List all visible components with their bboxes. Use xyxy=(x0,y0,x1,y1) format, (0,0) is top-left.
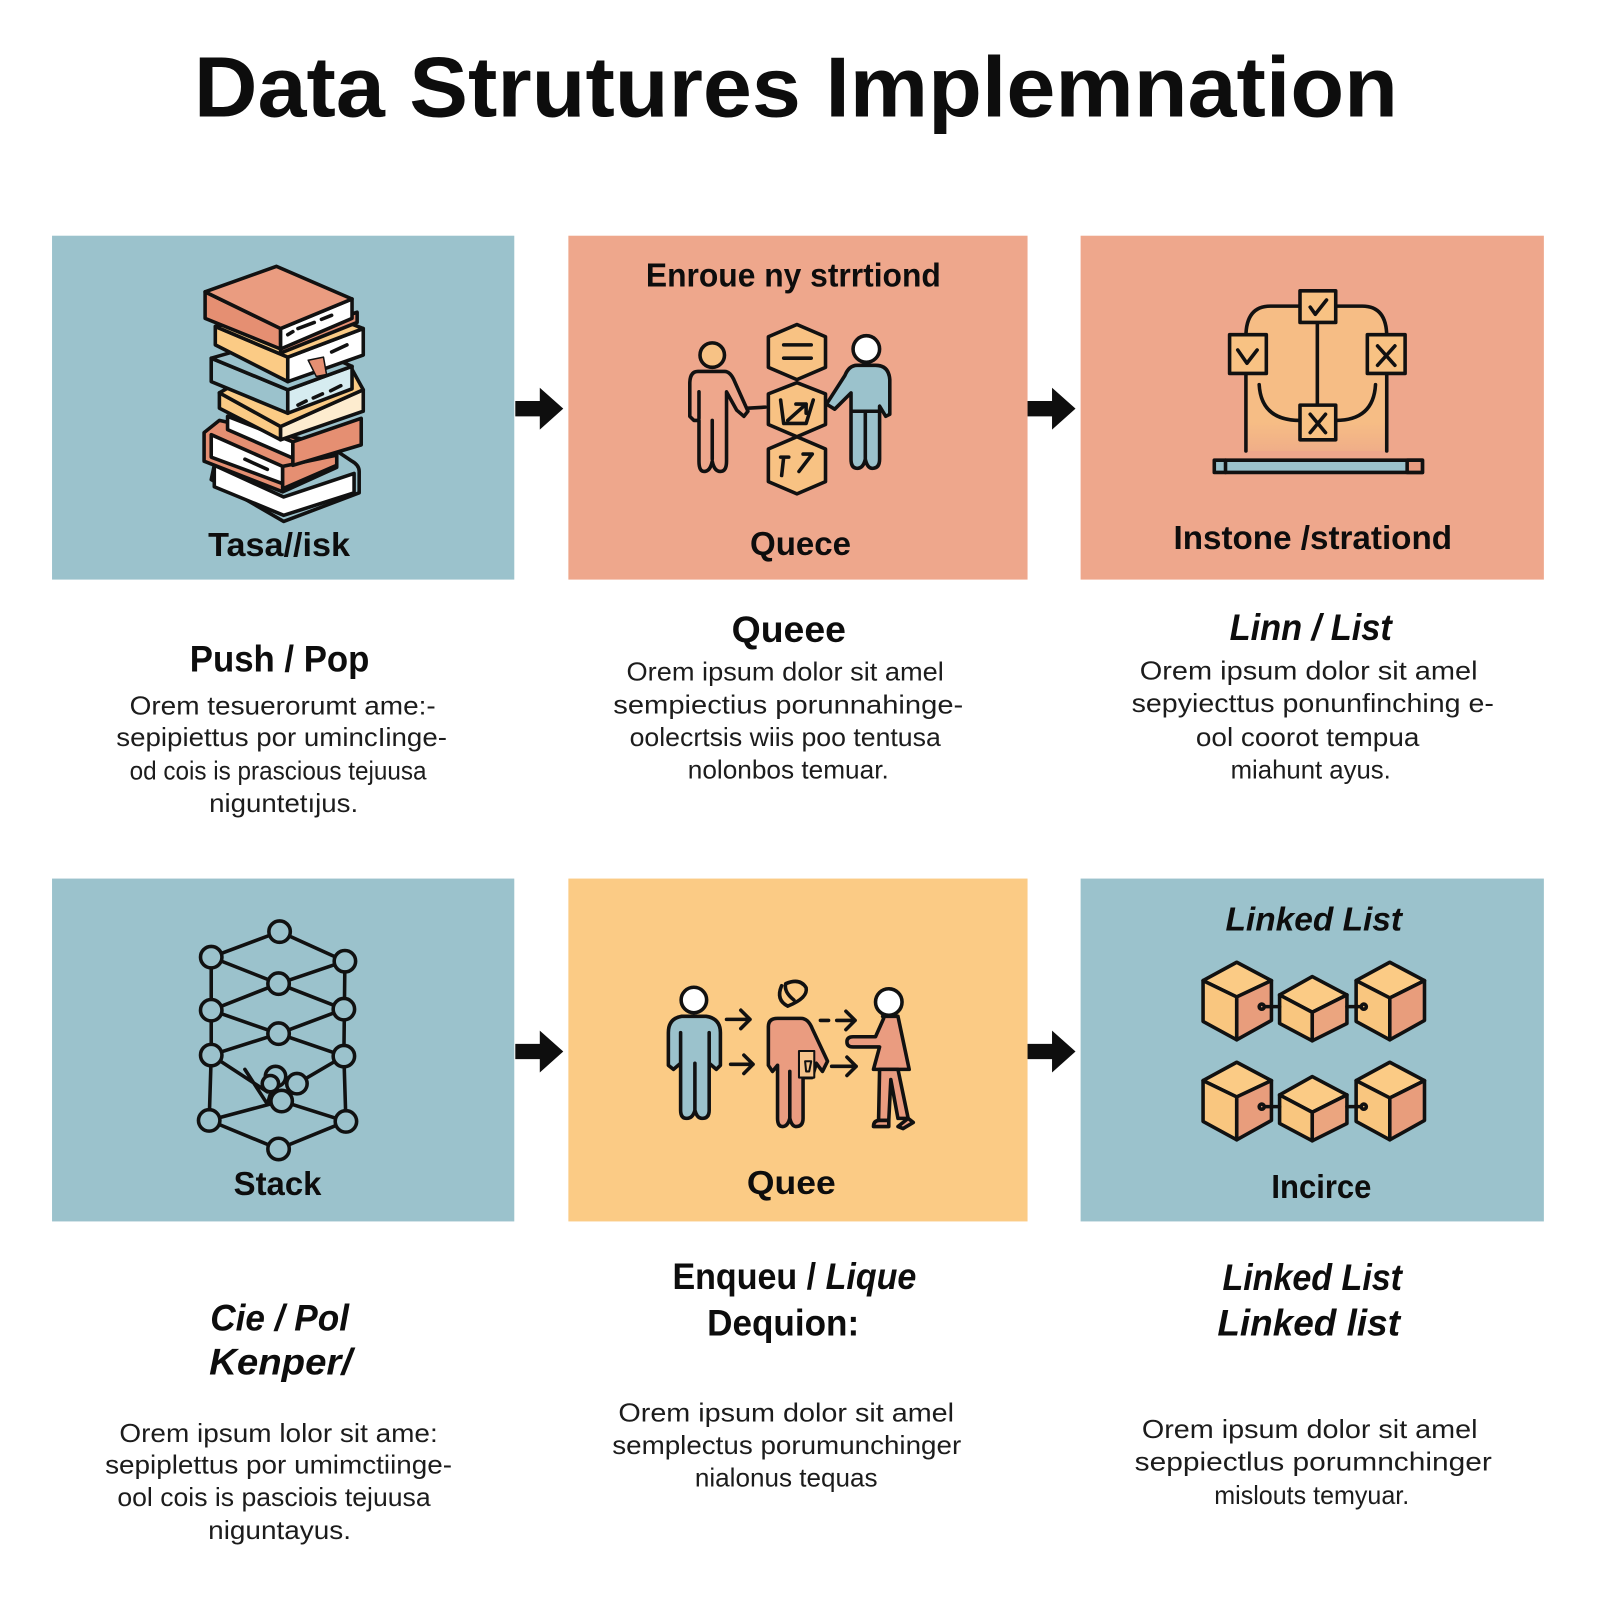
panel label: Quee xyxy=(747,1165,836,1202)
text block: Enqueu / Lique: nialonus tequas xyxy=(695,1465,878,1493)
text block: Cie / Pol: sepiplettus por umimctiinge- xyxy=(105,1451,452,1479)
text block: Linn / List: Linn / List xyxy=(1230,607,1393,648)
title: Data Strutures Implemnation xyxy=(194,39,1398,135)
text block: Cie / Pol: Orem ipsum lolor sit ame: xyxy=(119,1420,438,1448)
text block: Enqueu / Lique: semplectus porumunchinger xyxy=(612,1432,962,1460)
text block: Push / Pop xyxy=(116,638,447,818)
icon: person and hexagon queue xyxy=(690,324,890,494)
text block: Linked List: Linked list xyxy=(1217,1303,1402,1344)
text block: Cie / Pol: Cie / Pol xyxy=(210,1298,350,1339)
text block: Linked List: Orem ipsum dolor sit amel xyxy=(1142,1416,1478,1444)
panel: instruction network xyxy=(1081,236,1544,580)
panel: stack graph xyxy=(52,879,514,1221)
arrow xyxy=(515,388,563,430)
text block: Queee: Orem ipsum dolor sit amel xyxy=(627,659,944,687)
panel: queue exchange xyxy=(568,236,1028,580)
text block: Cie / Pol: Kenper/ xyxy=(209,1341,356,1382)
panel label: Stack xyxy=(234,1166,322,1203)
arrow xyxy=(1028,388,1076,430)
panel heading: Enroue ny strrtiond xyxy=(646,258,941,295)
text block: Enqueu / Lique xyxy=(612,1256,962,1493)
panel: stack of books xyxy=(52,236,514,580)
text block: Push / Pop: niguntetıjus. xyxy=(209,790,358,818)
text block: Queee: Queee xyxy=(732,609,846,650)
text block: Enqueu / Lique: Enqueu / Lique xyxy=(672,1256,916,1297)
panel label: Tasa//isk xyxy=(208,527,350,564)
icon: book stack xyxy=(204,266,363,521)
icon: linked cubes xyxy=(1203,962,1424,1141)
text block: Cie / Pol xyxy=(105,1298,452,1545)
text block: Linked List xyxy=(1135,1257,1492,1510)
icon: people passing items xyxy=(668,981,913,1129)
text block: Push / Pop: Orem tesuerorumt ame:- xyxy=(130,692,436,720)
panel label: Quece xyxy=(750,526,851,563)
text block: Linked List: seppiectlus porumnchinger xyxy=(1135,1448,1492,1476)
text block: Linked List: mislouts temyuar. xyxy=(1214,1482,1409,1510)
text block: Queee xyxy=(613,609,963,785)
panel label: Instone /strationd xyxy=(1173,520,1452,557)
text block: Push / Pop: sepipiettus por umincIinge- xyxy=(116,724,447,752)
panel: linked list cubes xyxy=(1081,879,1544,1221)
icon: node graph xyxy=(198,921,357,1160)
text block: Cie / Pol: ool cois is pasciois tejuusa xyxy=(117,1484,431,1512)
text block: Linn / List xyxy=(1132,607,1494,785)
text block: Queee: sempiectius porunnahinge- xyxy=(613,691,963,719)
arrow xyxy=(1028,1031,1076,1072)
text block: Linked List: Linked List xyxy=(1222,1257,1404,1298)
panel label: Incirce xyxy=(1271,1169,1371,1206)
text block: Push / Pop: Push / Pop xyxy=(190,638,369,679)
panel: queue people xyxy=(568,879,1028,1221)
text block: Linn / List: sepyiecttus ponunfinching e- xyxy=(1132,690,1494,718)
arrow xyxy=(515,1031,563,1072)
text block: Linn / List: ool coorot tempua xyxy=(1196,724,1420,752)
text block: Enqueu / Lique: Orem ipsum dolor sit amel xyxy=(618,1399,954,1427)
text block: Queee: oolecrtsis wiis poo tentusa xyxy=(630,724,942,752)
panel heading: Linked List xyxy=(1226,902,1404,939)
icon: check and cross network xyxy=(1214,291,1422,472)
text block: Enqueu / Lique: Dequion: xyxy=(707,1303,859,1344)
text block: Linn / List: miahunt ayus. xyxy=(1231,757,1391,785)
text block: Push / Pop: od cois is prascious tejuusa xyxy=(130,758,427,786)
text block: Queee: nolonbos temuar. xyxy=(688,757,889,785)
text block: Cie / Pol: niguntayus. xyxy=(208,1517,351,1545)
text block: Linn / List: Orem ipsum dolor sit amel xyxy=(1140,658,1478,686)
